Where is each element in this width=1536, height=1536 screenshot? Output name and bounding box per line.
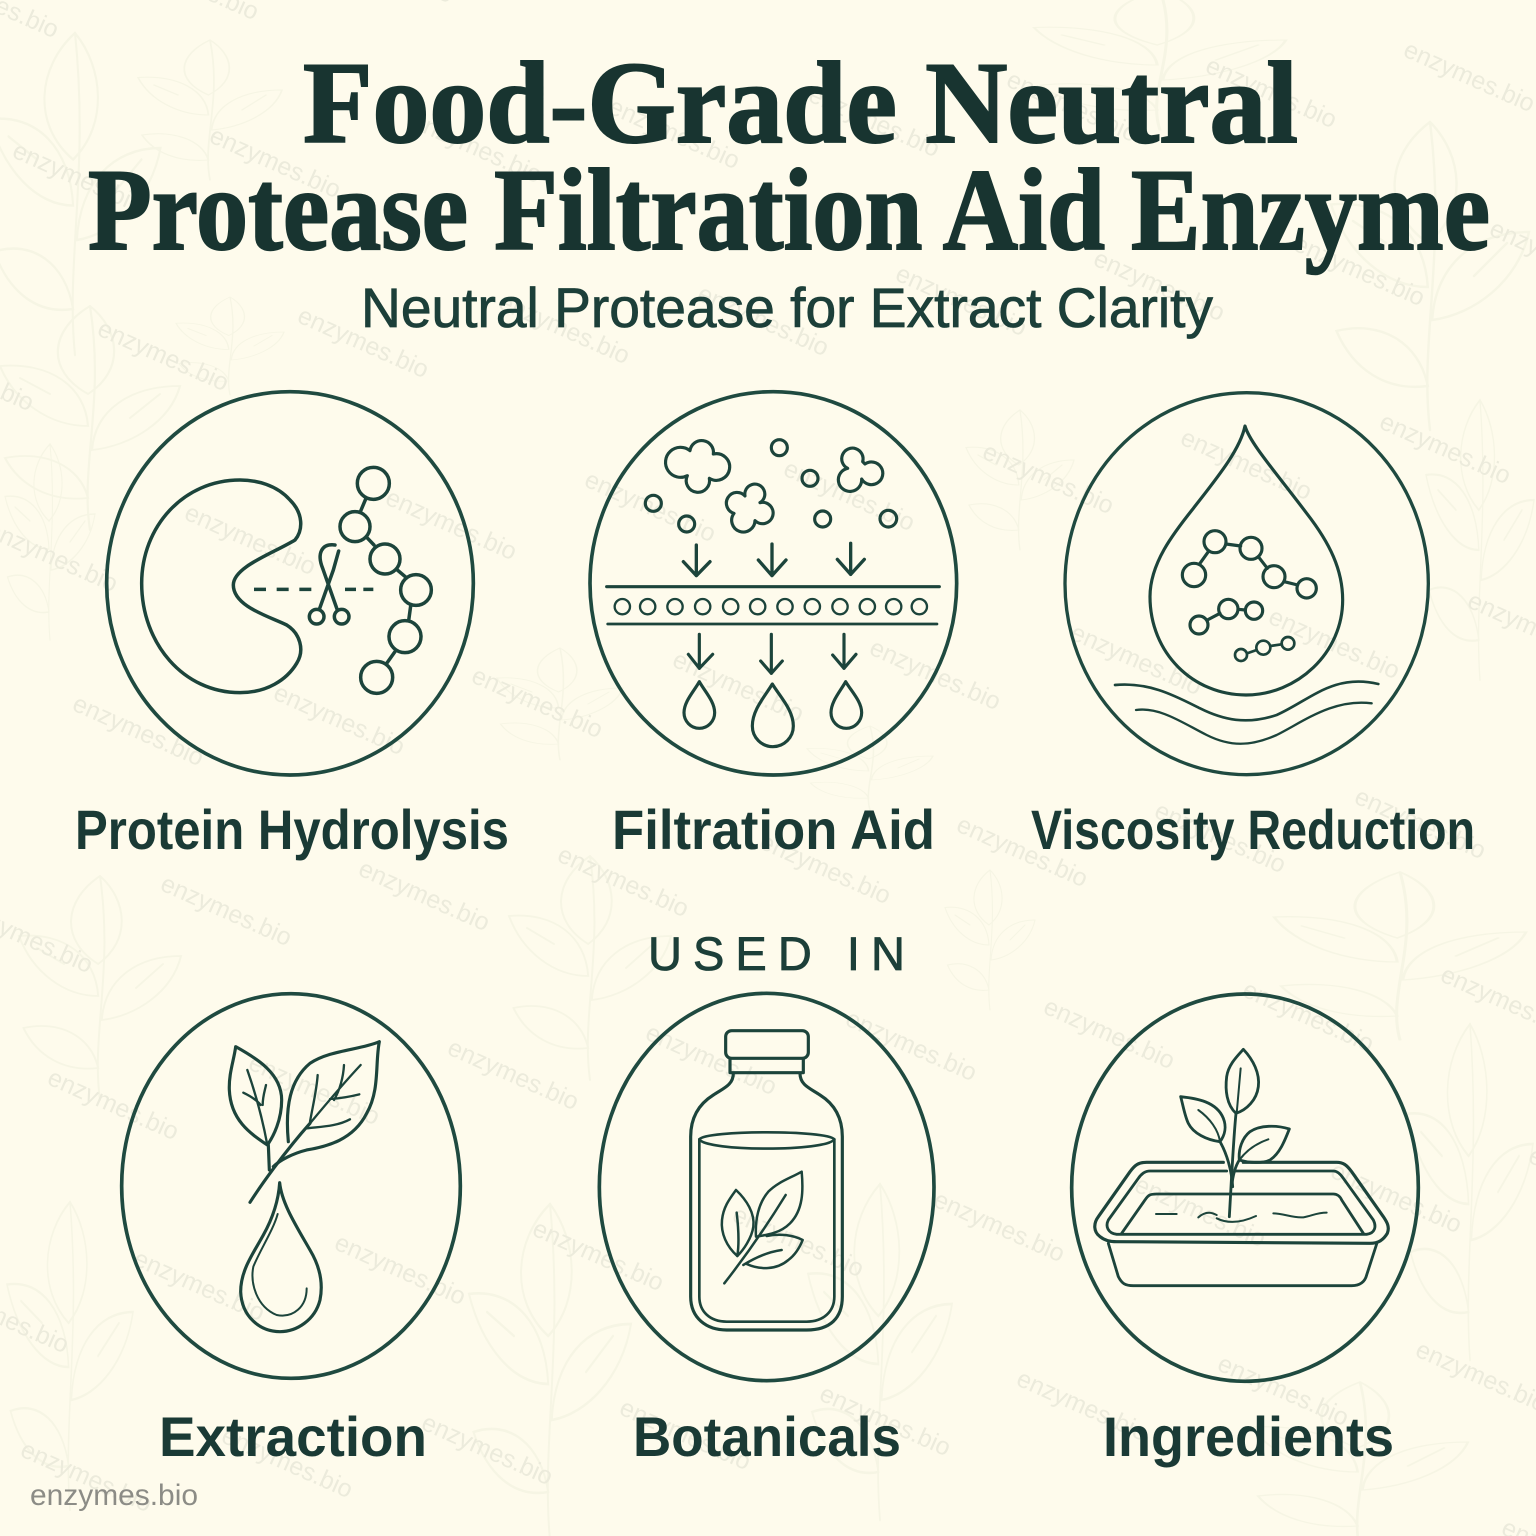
panel: viscosity reduction icon — [1065, 393, 1428, 775]
watermark layer: enzymes.bio — [728, 1200, 868, 1283]
watermark layer: enzymes.bio — [1238, 975, 1378, 1058]
watermark layer: enzymes.bio — [1130, 1170, 1270, 1253]
watermark layer: enzymes.bio — [1213, 1349, 1353, 1432]
watermark layer: enzymes.bio — [1201, 51, 1341, 134]
watermark layer: enzymes.bio — [1012, 1364, 1152, 1447]
icon: flow waves — [1115, 682, 1378, 744]
icon ring — [1065, 393, 1428, 775]
icon: clear drops — [684, 682, 862, 747]
icon: liquid — [699, 1132, 834, 1322]
subtitle: Neutral Protease for Extract Clarity — [361, 276, 1213, 339]
watermark layer: enzymes.bio — [381, 483, 521, 566]
watermark layer: enzymes.bio — [978, 437, 1118, 520]
watermark layer: enzymes.bio — [180, 498, 320, 581]
icon: peptide chain — [340, 467, 431, 693]
icon: seedling — [1181, 1049, 1289, 1217]
title: Food-Grade Neutral — [303, 39, 1298, 168]
panel: botanicals icon — [599, 993, 934, 1381]
icon: drop — [1150, 426, 1343, 695]
watermark layer: enzymes.bio — [1350, 782, 1490, 865]
watermark layer: enzymes.bio — [93, 314, 233, 397]
section heading: used in: USED IN — [648, 927, 905, 980]
icon ring — [1072, 994, 1418, 1381]
watermark layer: enzymes.bio — [641, 1018, 781, 1101]
icon ring — [122, 994, 460, 1378]
watermark layer: enzymes.bio — [68, 689, 208, 772]
panel: filtration aid icon — [590, 392, 957, 775]
watermark layer: enzymes.bio — [1002, 65, 1142, 148]
icon: extract drop — [241, 1183, 321, 1332]
icon ring — [599, 993, 934, 1381]
watermark layer: enzymes.bio — [1289, 229, 1429, 312]
watermark layer: enzymes.bio — [1066, 618, 1206, 701]
watermark layer: enzymes.bio — [891, 259, 1031, 342]
icon: arrows below filter — [688, 634, 856, 673]
watermark layer: enzymes.bio — [293, 301, 433, 384]
watermark layer: enzymes.bio — [615, 1393, 755, 1476]
watermark layer: enzymes.bio — [528, 1214, 668, 1297]
panel: extraction icon — [122, 994, 460, 1378]
watermark layer: enzymes.bio — [1326, 1156, 1466, 1239]
watermark layer: enzymes.bio — [269, 678, 409, 761]
watermark layer: enzymes.bio — [205, 121, 345, 204]
watermark layer: enzymes.bio — [604, 92, 744, 175]
label: extraction: Extraction — [159, 1405, 427, 1468]
watermark layer: enzymes.bio — [1399, 35, 1536, 118]
watermark layer: enzymes.bio — [841, 1004, 981, 1087]
icon: cleavage line — [254, 584, 373, 595]
panel: protein hydrolysis icon — [107, 392, 473, 775]
icon: bottle — [691, 1031, 842, 1330]
icon: medium molecule — [1190, 599, 1263, 634]
icon ring — [107, 392, 473, 775]
watermark layer: enzymes.bio — [815, 1379, 955, 1462]
icon: label leaf — [722, 1172, 803, 1283]
label: ingredients: Ingredients — [1103, 1405, 1394, 1468]
label: botanicals: Botanicals — [633, 1405, 901, 1468]
icon: long molecule — [1182, 531, 1316, 598]
watermark layer: enzymes.bio — [804, 80, 944, 163]
footer brand: enzymes.bio — [30, 1479, 198, 1512]
watermark layer: enzymes.bio — [467, 661, 607, 744]
icon: filter membrane — [607, 587, 939, 624]
icon: short molecule — [1235, 637, 1294, 661]
watermark layer: enzymes.bio — [1150, 796, 1290, 879]
watermark layer: enzymes.bio — [693, 279, 833, 362]
icon: scissors — [309, 545, 349, 624]
panel: ingredients icon — [1072, 994, 1418, 1381]
watermark layer: enzymes.bio — [553, 840, 693, 923]
watermark layer: enzymes.bio — [494, 287, 634, 370]
label: protein hydrolysis: Protein Hydrolysis — [75, 798, 509, 861]
watermark layer: enzymes.bio — [929, 1185, 1069, 1268]
watermark layer: enzymes.bio — [1039, 992, 1179, 1075]
watermark layer: enzymes.bio — [443, 1033, 583, 1116]
watermark layer: enzymes.bio — [16, 1435, 156, 1518]
title — [88, 39, 1490, 275]
watermark layer: enzymes.bio — [417, 1408, 557, 1491]
watermark layer: enzymes.bio — [1375, 407, 1515, 490]
watermark layer: enzymes.bio — [755, 827, 895, 910]
watermark layer: enzymes.bio — [865, 633, 1005, 716]
label: filtration aid: Filtration Aid — [612, 798, 935, 861]
watermark layer: enzymes.bio — [668, 645, 808, 728]
icon: particles — [645, 440, 897, 532]
watermark layer: enzymes.bio — [8, 136, 148, 219]
icon: enzyme — [142, 480, 301, 693]
watermark layer: enzymes.bio — [1089, 244, 1229, 327]
watermark layer: enzymes.bio — [244, 1048, 384, 1131]
watermark layer: enzymes.bio — [129, 1244, 269, 1327]
watermark layer: enzymes.bio — [354, 854, 494, 937]
watermark layer: enzymes.bio — [43, 1063, 183, 1146]
icon: tray — [1095, 1162, 1388, 1286]
watermark layer: enzymes.bio — [156, 869, 296, 952]
watermark layer: enzymes.bio — [330, 1228, 470, 1311]
watermark layer: enzymes.bio — [1176, 423, 1316, 506]
watermark layer: enzymes.bio — [580, 465, 720, 548]
icon: water ripples — [1156, 1213, 1327, 1222]
icon: right leaf — [250, 1042, 379, 1202]
watermark layer: enzymes.bio — [1264, 602, 1404, 685]
icon ring — [590, 392, 957, 775]
watermark layer: enzymes.bio — [952, 810, 1092, 893]
watermark layer: enzymes.bio — [406, 106, 546, 189]
watermark layer: enzymes.bio — [779, 454, 919, 537]
icon: arrows above filter — [683, 543, 864, 576]
watermark layer: enzymes.bio — [217, 1421, 357, 1504]
icon: left leaf — [229, 1047, 282, 1145]
